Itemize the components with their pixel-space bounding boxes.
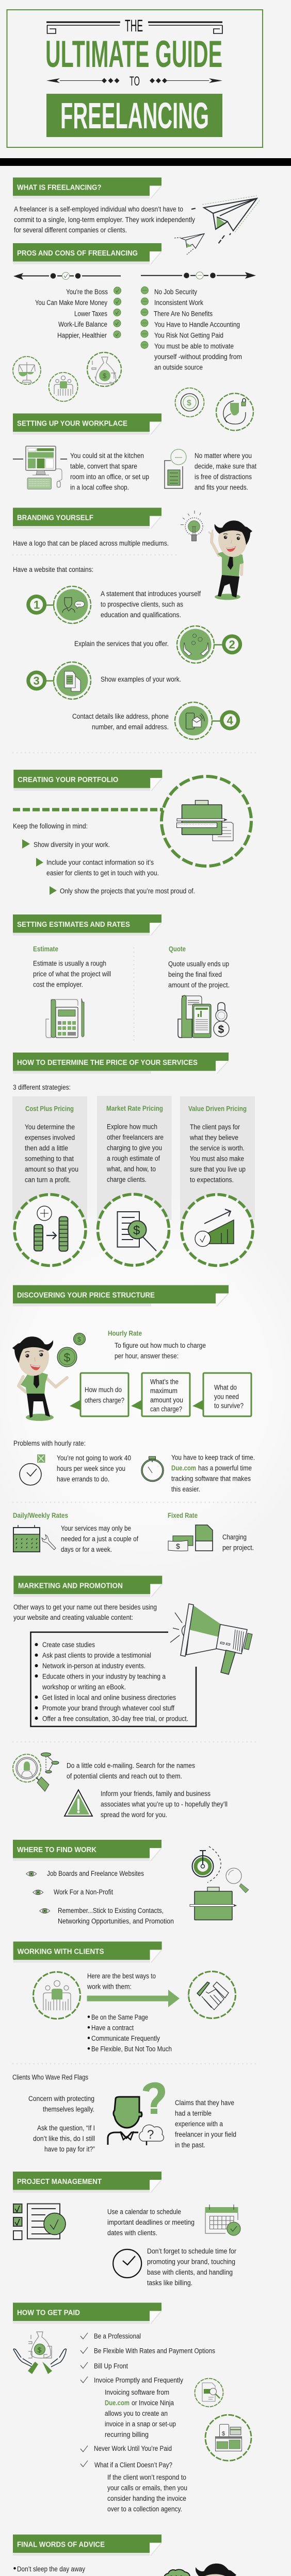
card: value driven pricing: sure that you live up (190, 1165, 246, 1173)
heading: discovering your price structure (13, 1285, 229, 1307)
heading: marketing and promotion: MARKETING AND PROMOTION (18, 1582, 123, 1590)
list box: marketing ideas: Educate others in your industry by teaching a (42, 1672, 166, 1681)
heading: setting estimates and rates: SETTING ESTIMATES AND RATES (17, 921, 130, 929)
heading: pros and cons (13, 243, 161, 264)
text: examples: Show examples of your work. (101, 675, 181, 683)
card: market rate pricing: charge clients. (107, 1176, 147, 1183)
text: red flags left: don’t like this, do I still (33, 2135, 95, 2142)
card: market rate pricing: Market Rate Pricing (106, 1105, 163, 1112)
card: cost plus pricing: Cost Plus Pricing (25, 1105, 74, 1113)
list: best ways: Be on the Same Page (91, 2013, 148, 2021)
bullet: contact information (36, 858, 159, 877)
card: cost plus pricing: You determine the (25, 1123, 75, 1131)
list box: marketing ideas: Offer a free consultation, 30-day free trial, or product. (42, 1715, 188, 1723)
heading: setting up your workplace: SETTING UP YOUR WORKPLACE (17, 419, 127, 428)
text: ways to work: Here are the best ways to (87, 1972, 156, 1980)
list: cons: yourself -without prodding from (154, 353, 242, 361)
card: market rate pricing: a rough estimate of (107, 1155, 160, 1162)
text: workplace needs: No matter where you (195, 452, 252, 460)
text: contact: number, and email address. (92, 723, 169, 731)
text: workplace needs: and fits your needs. (195, 483, 248, 492)
text: strategies intro: 3 different strategies: (13, 1083, 71, 1091)
text: hourly rate (108, 1329, 206, 1360)
arrow divider: cons (141, 272, 256, 279)
icon: wallet and phone (205, 2415, 251, 2461)
text: red flags left: themselves legally. (43, 2105, 94, 2113)
list box: marketing ideas: Get listed in local and online business directories (42, 1694, 176, 1701)
icon: document magnifier: $ (133, 1224, 140, 1238)
text: cold email: of potential clients and reach out to them. (67, 1772, 182, 1780)
number badge 4: 4 (227, 714, 233, 727)
speech box: how much do others charge: How much do (85, 1386, 122, 1394)
heading: pros and cons: PROS AND CONS OF FREELANCING (17, 249, 138, 258)
list: best ways: Communicate Frequently (91, 2035, 160, 2042)
arrow divider: pros (13, 272, 121, 280)
arrow ornament right (150, 78, 222, 83)
card: cost plus pricing (12, 1096, 87, 1265)
step 1: introduction (26, 586, 201, 623)
text: red flags left: Ask the question, “If I (37, 2124, 95, 2132)
icon: phone and envelope (175, 702, 212, 739)
icon: money and document: $ (176, 1542, 180, 1550)
icon: invoice search (195, 2378, 223, 2407)
bullet: remember (40, 1907, 174, 1925)
bullet: contact information: Include your contact information so it’s (46, 858, 154, 867)
character: pointing at idea (208, 520, 252, 600)
panel: quote: Quote usually ends up (168, 960, 229, 968)
heading: branding yourself (13, 508, 161, 529)
fixed rate block: Fixed Rate (168, 1512, 198, 1519)
text: red flags heading: Clients Who Wave Red Flags (12, 2073, 88, 2081)
icon: invoice tablet and lock (178, 995, 229, 1038)
text: contact: Contact details like address, phone (72, 713, 169, 720)
panel: estimate: Estimate is usually a rough (33, 959, 106, 968)
text: red flags right (175, 2099, 236, 2149)
card: market rate pricing: other freelancers are (107, 1133, 164, 1141)
speech box: maximum amount (131, 1373, 190, 1416)
step 3: examples (26, 662, 181, 699)
heading: working with clients: WORKING WITH CLIENTS (18, 1947, 104, 1956)
list: cons: You must be able to motivate (154, 342, 234, 350)
text: hourly rate: To figure out how much to charge (115, 1342, 206, 1349)
list: cons: No Job Security (154, 288, 197, 296)
list: getting paid: If the client won’t respond to (107, 2473, 186, 2481)
list: getting paid: Invoice Promptly and Frequently (94, 2376, 183, 2384)
number badge 1 (26, 595, 54, 615)
panel: estimate: price of what the project will (33, 970, 111, 978)
icon: hands and gears (177, 626, 214, 663)
text: red flags left (28, 2095, 95, 2153)
speech box: maximum amount: What’s the (150, 1378, 179, 1386)
fixed rate block: Charging (222, 1533, 247, 1541)
panel: estimate: Estimate (33, 945, 58, 953)
icon: dollar coins: $ (64, 1351, 70, 1364)
list: getting paid: Bill Up Front (94, 2362, 128, 2370)
text: workplace location: You could sit at the kitchen (70, 452, 144, 460)
text: schedule time: tasks like billing. (147, 2279, 192, 2286)
text: statement: education and qualifications. (101, 611, 181, 619)
card: cost plus pricing: expenses involved (25, 1133, 75, 1142)
text: track time: has a powerful time (198, 1464, 252, 1472)
text: logo advice: Have a logo that can be placed across multiple mediums. (13, 539, 169, 547)
text: red flags right: Claims that they have (175, 2099, 234, 2107)
icon: team (33, 1972, 80, 2019)
heading: project management (13, 2172, 161, 2193)
list: pros (35, 287, 121, 339)
icon: growth chart (182, 1194, 253, 1265)
list: getting paid: invoice in a snap or set-up (105, 2420, 176, 2428)
list: getting paid: recurring billing (105, 2431, 149, 2438)
text: schedule time (147, 2247, 236, 2286)
icon: person speaking (54, 586, 91, 623)
text: workplace needs: is free of distractions (195, 473, 252, 481)
list box: marketing ideas: workshop or writing an eBook. (42, 1683, 126, 1691)
card: value driven pricing: the service is worth. (190, 1144, 245, 1152)
text: marketing intro (13, 1603, 157, 1621)
list: cons (141, 286, 242, 371)
icon: locked person (216, 394, 253, 431)
text: forty hours: hours per week since you (57, 1465, 125, 1472)
text: calendar tip: important deadlines or meeting (107, 2218, 195, 2226)
list: getting paid: Due.com (105, 2399, 130, 2407)
daily weekly rates block: Daily/Weekly Rates (13, 1512, 68, 1519)
text: workplace location: in a local coffee shop. (70, 483, 129, 492)
card: value driven pricing: You must also make (190, 1155, 244, 1162)
speech box: need to survive: to survive? (214, 1402, 244, 1410)
text: cold email: Do a little cold e-mailing. Search for the names (67, 1762, 195, 1769)
icon: paper planes (174, 196, 260, 255)
panel: quote: amount of the project. (168, 981, 230, 989)
text: calendar tip: Use a calendar to schedule (107, 2208, 181, 2215)
text: workplace location (70, 452, 149, 492)
daily weekly rates block: needed for a just a couple of (61, 1535, 138, 1543)
list: pros: Lower Taxes (74, 310, 107, 317)
fixed rate block: per project. (222, 1544, 254, 1552)
list: best ways (89, 2013, 172, 2053)
text: workplace needs: decide, make sure that (195, 463, 256, 470)
list box: marketing ideas: Promote your brand through whatever cool stuff (42, 1704, 174, 1712)
number badge 2: 2 (229, 638, 235, 651)
text: red flags right: experience with a (175, 2120, 223, 2128)
speech box: how much do others charge: others charge? (85, 1396, 124, 1404)
heading: working with clients (13, 1941, 162, 1963)
number badge 3 (26, 671, 54, 690)
text: schedule time: promoting your brand, touching (147, 2258, 235, 2266)
icon: calendar and wrench (13, 1525, 56, 1552)
black divider bar (0, 158, 291, 166)
text: calendar tip: dates with clients. (107, 2229, 157, 2237)
card: value driven pricing: to expectations. (190, 1176, 234, 1184)
icon: documents (54, 662, 91, 699)
speech box: need to survive: What do (214, 1384, 237, 1391)
list: getting paid: allows you to create an (105, 2410, 168, 2417)
character: shrugging (182, 2564, 248, 2576)
step 4: contact details (72, 702, 240, 739)
card: cost plus pricing: then add a little (25, 1144, 68, 1152)
title ornament right (148, 22, 222, 33)
heading: where to find work (13, 1840, 161, 1861)
daily weekly rates block: Your services may only be (61, 1524, 131, 1532)
card: cost plus pricing: amount so that you (25, 1165, 78, 1173)
text: inform friends: associates what you’re up to - hopefully they’ll (101, 1800, 228, 1808)
text: track time: tracking software that makes (171, 1475, 251, 1483)
icon: clock (113, 2249, 141, 2278)
list: getting paid: consider handing the invoice (107, 2495, 186, 2502)
icon: handshake (189, 1971, 235, 2019)
icon: warning triangle (64, 1790, 92, 1816)
icon: thought bubble (164, 2569, 190, 2576)
icon: wallet and phone: $ (222, 2431, 225, 2437)
heading: creating your portfolio: CREATING YOUR PORTFOLIO (18, 776, 118, 784)
list: pros: Work-Life Balance (58, 320, 107, 328)
bullet: diversity: Show diversity in your work. (34, 841, 110, 849)
panel: quote: Quote (169, 945, 186, 953)
list: getting paid: Be Flexible With Rates and Payment Options (94, 2347, 215, 2354)
icon: megaphone (170, 1604, 252, 1674)
title word: to: TO (130, 74, 140, 89)
number badge 1: 1 (34, 599, 40, 611)
card: cost plus pricing: can turn a profit. (25, 1176, 71, 1184)
list: pros: You're the Boss (66, 288, 108, 296)
card: value driven pricing: The client pays for (190, 1123, 240, 1131)
text: keep in mind: Keep the following in mind: (13, 822, 88, 830)
number badge 2 (214, 634, 242, 654)
text: forty hours: have errands to do. (57, 1476, 109, 1483)
speech box: maximum amount: amount you (150, 1396, 183, 1404)
list box: marketing ideas: Create case studies (42, 1641, 95, 1649)
icon: balance scale (13, 357, 41, 384)
heading: branding yourself: BRANDING YOURSELF (17, 514, 93, 522)
icon: hands holding money bag (13, 2332, 66, 2374)
panel: quote (168, 945, 230, 1038)
bullet: proud projects: Only show the projects that you’re most proud of. (60, 887, 195, 895)
icon: confused client (108, 2082, 165, 2145)
heading: how to get paid (13, 2303, 161, 2324)
text: red flags left: have to pay for it?” (44, 2145, 95, 2153)
bullet: non-profit: Work For a Non-Profit (54, 1888, 113, 1896)
speech box: need to survive: you need (214, 1393, 239, 1400)
icon: checklist (13, 2204, 66, 2240)
title word: the: THE (125, 16, 143, 35)
heading: how to determine the price (13, 1053, 229, 1074)
heading: setting up your workplace (13, 413, 161, 435)
title box: freelancing (46, 94, 222, 137)
heading: final words of advice: FINAL WORDS OF ADVICE (17, 2541, 105, 2549)
panel: estimate: cost the employer. (33, 981, 83, 988)
text: red flags right: in the past. (175, 2141, 205, 2149)
heading: how to determine the price: HOW TO DETERMINE THE PRICE OF YOUR SERVICES (17, 1059, 198, 1067)
bullet: diversity (22, 839, 110, 849)
text: inform friends (101, 1790, 228, 1819)
list: cons: Inconsistent Work (154, 299, 203, 307)
icon: confused client: ? (147, 2128, 154, 2142)
title ornament left (46, 22, 120, 33)
daily weekly rates block: days or for a week. (61, 1546, 112, 1553)
text: freelancer definition: for several different companies or clients. (14, 226, 127, 234)
icon: money bag (87, 352, 121, 386)
text: schedule time: base with clients, and handling (147, 2268, 233, 2276)
heading: where to find work: WHERE TO FIND WORK (17, 1846, 96, 1854)
heading: creating your portfolio (13, 770, 162, 791)
card: value driven pricing (180, 1096, 255, 1265)
list: getting paid: over to a collection agency. (107, 2505, 182, 2513)
list: getting paid: Be a Professional (94, 2332, 141, 2340)
list box: marketing ideas: Network in-person at industry events. (42, 1662, 146, 1670)
icon: desktop computer (13, 446, 67, 489)
title block (7, 10, 263, 147)
arrow (87, 1990, 180, 2007)
text: marketing intro: your website and creating valuable content: (13, 1614, 133, 1621)
icon: briefcase with ruler (161, 776, 251, 866)
text: red flags right: freelancer in your field (175, 2131, 236, 2138)
list: final advice (14, 2565, 110, 2576)
text: contact (72, 713, 169, 731)
number badge 3: 3 (33, 674, 40, 687)
daily weekly rates block (13, 1512, 138, 1553)
icon: calculator (46, 998, 84, 1038)
heading: discovering your price structure: DISCOVERING YOUR PRICE STRUCTURE (17, 1291, 155, 1299)
text: schedule time: Don’t forget to schedule time for (147, 2247, 236, 2255)
card: market rate pricing (97, 1096, 171, 1265)
heading: project management: PROJECT MANAGEMENT (17, 2178, 102, 2186)
text: forty hours: You’re not going to work 40 (57, 1454, 131, 1462)
list: best ways: Have a contract (91, 2024, 134, 2032)
icon: clipboard document (165, 449, 186, 488)
bullet: remember: Remember...Stick to Existing Contacts, (58, 1907, 164, 1914)
text: track time: Due.com (171, 1464, 196, 1472)
list box: marketing ideas: Ask past clients to provide a testimonial (42, 1652, 151, 1659)
card: value driven pricing: Value Driven Pricing (188, 1105, 247, 1113)
heading: setting estimates and rates (13, 914, 161, 936)
text: red flags left: Concern with protecting (28, 2095, 94, 2103)
text: hourly rate: Hourly Rate (108, 1329, 142, 1337)
text: marketing intro: Other ways to get your name out there besides using (13, 1603, 157, 1611)
title frame (7, 10, 263, 147)
list box: marketing ideas (31, 1632, 196, 1726)
panel: estimate (33, 945, 111, 1038)
text: freelancer definition: commit to a single, long-term employer. They work independently (14, 216, 195, 224)
number badge 4 (212, 710, 240, 731)
bullet: remember: Networking Opportunities, and Promotion (58, 1918, 174, 1925)
dashed connector line (13, 808, 163, 811)
card: cost plus pricing: something to that (25, 1155, 74, 1162)
panel: quote: being the final fixed (168, 971, 222, 978)
text: red flags right: had a terrible (175, 2109, 212, 2117)
icon: coin stacks (14, 1194, 86, 1265)
speech box: maximum amount: can charge? (150, 1405, 182, 1413)
icon: dollar coins (57, 1333, 86, 1367)
list: getting paid (80, 2332, 215, 2513)
text: inform friends: spread the word for you. (101, 1811, 167, 1819)
list: pros: You Can Make More Money (35, 299, 107, 307)
list: getting paid: Invoicing software from (105, 2388, 169, 2396)
icon: coin: $ (187, 399, 191, 408)
text: track time: this easier. (171, 1485, 200, 1493)
icon: calendar check (205, 2205, 240, 2235)
icon: invoice tablet and lock: $ (218, 1024, 224, 1036)
list: cons: an outside source (154, 364, 203, 371)
text: forty hours (57, 1454, 131, 1483)
text: freelancer definition: A freelancer is a self-employed individual who doesn’t have to (14, 205, 183, 213)
text: workplace needs (195, 452, 256, 492)
speech box: need to survive (192, 1373, 251, 1416)
heading: marketing and promotion (13, 1575, 162, 1597)
text: workplace location: table, convert that spare (70, 463, 137, 470)
list: best ways: Be Flexible, But Not Too Much (91, 2045, 172, 2053)
list: cons: There Are No Benefits (154, 310, 213, 317)
icon: dollar coins: $ (77, 1335, 82, 1343)
speech box: maximum amount: maximum (150, 1387, 177, 1395)
card: value driven pricing: what they believe (189, 1133, 238, 1142)
icon: target, magnifier and briefcase (190, 1846, 249, 1920)
text: website intro: Have a website that contains: (13, 566, 93, 573)
text: statement: A statement that introduces yourself (101, 590, 201, 598)
list: getting paid: your calls or emails, then you (107, 2484, 187, 2492)
heading: how to get paid: HOW TO GET PAID (17, 2309, 80, 2317)
text: freelancer definition (14, 205, 195, 234)
text: track time: You have to keep track of time. (171, 1454, 255, 1461)
text: statement (101, 590, 201, 619)
icon: hands holding money bag: $ (37, 2346, 41, 2354)
list: pros: Happier, Healthier (57, 332, 107, 339)
bullet: contact information: easier for clients to get in touch with you. (46, 869, 159, 877)
icon: coin (175, 388, 204, 417)
list: getting paid: What if a Client Doesn’t Pay? (94, 2461, 172, 2469)
list: getting paid: or Invoice Ninja (132, 2399, 174, 2407)
heading: what is freelancing (13, 177, 161, 199)
icon: document magnifier (98, 1194, 169, 1265)
text: workplace location: room into an office, or set up (70, 473, 149, 481)
card: market rate pricing: what, and how, to (106, 1165, 156, 1173)
icon: light bulb (181, 511, 203, 541)
text: inform friends: Inform your friends, family and business (101, 1790, 211, 1798)
list: getting paid: Never Work Until You’re Paid (94, 2445, 172, 2452)
arrow ornament left (46, 78, 120, 83)
icon: money bag: $ (103, 372, 107, 380)
card: market rate pricing: charging to give you (107, 1144, 162, 1152)
fixed rate block (168, 1512, 254, 1552)
list: final advice: Don’t sleep the day away (17, 2565, 85, 2573)
speech box: how much do others charge (70, 1373, 128, 1416)
card: market rate pricing: Explore how much (107, 1123, 157, 1130)
list: cons: You Risk Not Getting Paid (154, 332, 223, 339)
text: services: Explain the services that you offer. (74, 640, 169, 648)
text: calendar tip (107, 2208, 195, 2237)
character: presenting questions (12, 1336, 67, 1421)
icon: team of people (49, 372, 78, 401)
text: problems heading: Problems with hourly rate: (13, 1439, 86, 1447)
list: cons: You Have to Handle Accounting (154, 320, 240, 329)
icon: clock with x (20, 1454, 45, 1485)
text: hourly rate: per hour, answer these: (115, 1352, 179, 1360)
bullet: job boards: Job Boards and Freelance Websites (47, 1870, 144, 1877)
icon: money and document (168, 1525, 213, 1551)
text: ways to work (87, 1972, 156, 1991)
step 2: services (74, 626, 242, 663)
heading: what is freelancing: WHAT IS FREELANCING? (17, 183, 102, 192)
heading: final words of advice (13, 2535, 161, 2555)
text: ways to work: work with them: (87, 1982, 132, 1991)
icon: search for clients (13, 1753, 59, 1791)
text: cold email (67, 1762, 195, 1780)
text: statement: to prospective clients, such as (101, 601, 183, 608)
bullet: non-profit (33, 1888, 113, 1896)
text: track time (171, 1454, 255, 1493)
icon: stopwatch (142, 1456, 163, 1481)
